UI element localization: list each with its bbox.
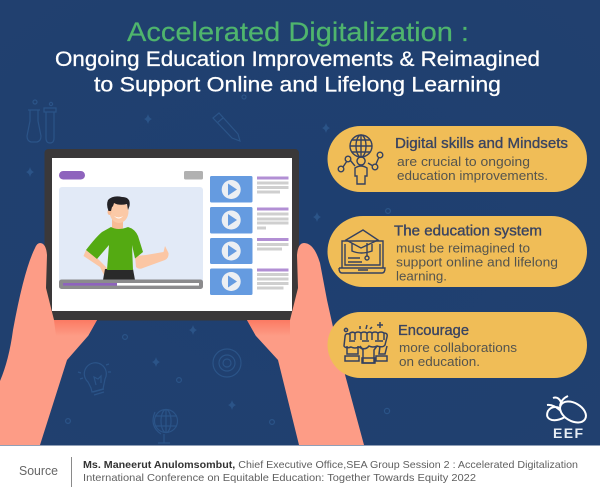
icon: raised fists xyxy=(344,322,387,363)
text: education system heading: The education system xyxy=(394,224,542,240)
background doodle icons xyxy=(27,95,390,443)
presenter figure xyxy=(84,196,169,280)
panel: digital skills xyxy=(328,126,587,192)
source label: Source xyxy=(19,464,58,478)
illustration: right hand xyxy=(247,243,364,445)
text: digital skills body: are crucial to ongoing xyxy=(397,154,530,169)
illustration: palm shadow left xyxy=(54,320,97,336)
icon: laptop with graduation cap xyxy=(339,230,385,273)
video list item 2 xyxy=(210,207,288,234)
logo: EEF xyxy=(547,396,590,441)
left arm xyxy=(84,250,110,279)
icon: pencil xyxy=(213,113,240,141)
icon: globe xyxy=(153,409,178,443)
icon: test tubes xyxy=(27,100,56,143)
footer panel xyxy=(0,446,600,492)
illustration: left hand xyxy=(0,243,97,445)
head xyxy=(110,200,128,223)
panel: education system xyxy=(328,216,587,287)
heading: green title line: Accelerated Digitalization : xyxy=(127,17,469,47)
smile xyxy=(114,216,123,218)
text: encourage body: on education. xyxy=(399,354,480,369)
panel: encourage xyxy=(328,312,587,378)
text: encourage body: more collaborations xyxy=(399,340,518,355)
text: education system body: learning. xyxy=(396,268,447,284)
right arm xyxy=(135,246,169,269)
gray button xyxy=(184,171,203,180)
illustration: tablet xyxy=(44,149,299,320)
video list item 4 xyxy=(210,268,288,295)
tablet screen xyxy=(52,158,292,311)
decorative sparkles xyxy=(26,114,330,410)
neck xyxy=(112,218,123,230)
illustration: palm shadow right xyxy=(247,320,290,336)
heading: subtitle line one: Ongoing Education Improvements & Reimagined xyxy=(55,47,540,71)
icon: light bulb xyxy=(78,363,111,395)
logo wordmark: EEF xyxy=(553,425,583,441)
green shirt xyxy=(86,227,143,270)
text: digital skills body: education improvements. xyxy=(397,168,548,183)
text: education system body: support online and lifelong xyxy=(396,254,558,270)
text: education system body: must be reimagined to xyxy=(396,240,530,256)
video panel xyxy=(59,187,203,289)
logo mark xyxy=(547,396,590,427)
source line two: International Conference on Equitable Education: Together Towards Equity 2022 xyxy=(83,472,476,484)
video progress bar xyxy=(59,280,203,289)
text: encourage heading: Encourage xyxy=(398,323,469,339)
icon: target rings xyxy=(213,349,241,377)
video list item 1 xyxy=(210,176,288,202)
heading: subtitle line two: to Support Online and Lifelong Learning xyxy=(94,72,501,96)
text: digital skills heading: Digital skills and Mindsets xyxy=(395,136,568,152)
video list item 3 xyxy=(210,238,288,264)
source text xyxy=(83,459,578,484)
hair xyxy=(107,196,130,211)
purple pill xyxy=(59,171,85,180)
icon: globe and person network xyxy=(338,135,383,184)
title xyxy=(55,17,540,96)
tablet frame xyxy=(44,149,299,320)
source line one: Ms. Maneerut Anulomsombut, Chief Executive Office,SEA Group Session 2 : Accelerated Digitalization xyxy=(83,459,578,471)
decorative small circles xyxy=(66,95,390,424)
trousers xyxy=(103,269,135,280)
